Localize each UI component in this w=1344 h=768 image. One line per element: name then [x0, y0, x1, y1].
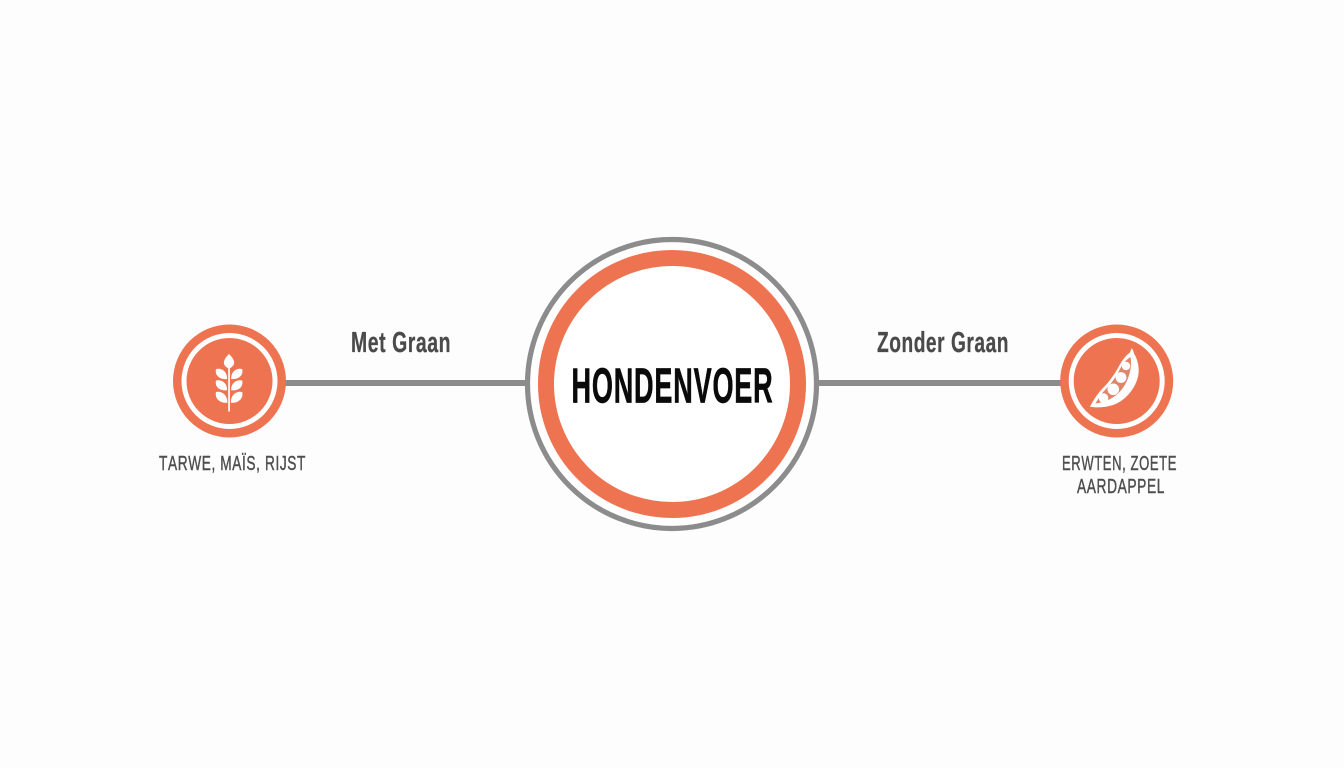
outer grey ring [528, 240, 816, 528]
central hub: Hondenvoer [528, 240, 816, 528]
branch label: Zonder Graan: Zonder Graan [877, 327, 1009, 359]
central title: HONDENVOER [572, 360, 774, 414]
wheat glyph [216, 354, 242, 412]
caption line 1: ERWTEN, ZOETE [1062, 452, 1177, 475]
connector line: right [816, 380, 1062, 386]
wheat badge [173, 324, 286, 438]
caption line 2: AARDAPPEL [1077, 475, 1165, 498]
icon: wheat [173, 324, 286, 438]
branch label: Met Graan: Met Graan [351, 327, 451, 359]
pea badge [1060, 324, 1173, 438]
caption: grain-free ingredients [1062, 452, 1177, 498]
pea badge white ring [1071, 336, 1162, 426]
orange ring [546, 258, 798, 510]
wheat badge white ring [184, 336, 275, 426]
connector line: left [284, 380, 528, 386]
pea pod glyph [1090, 348, 1139, 407]
caption: grains: TARWE, MAÏS, RIJST [159, 452, 306, 475]
icon: pea pod [1060, 324, 1173, 438]
